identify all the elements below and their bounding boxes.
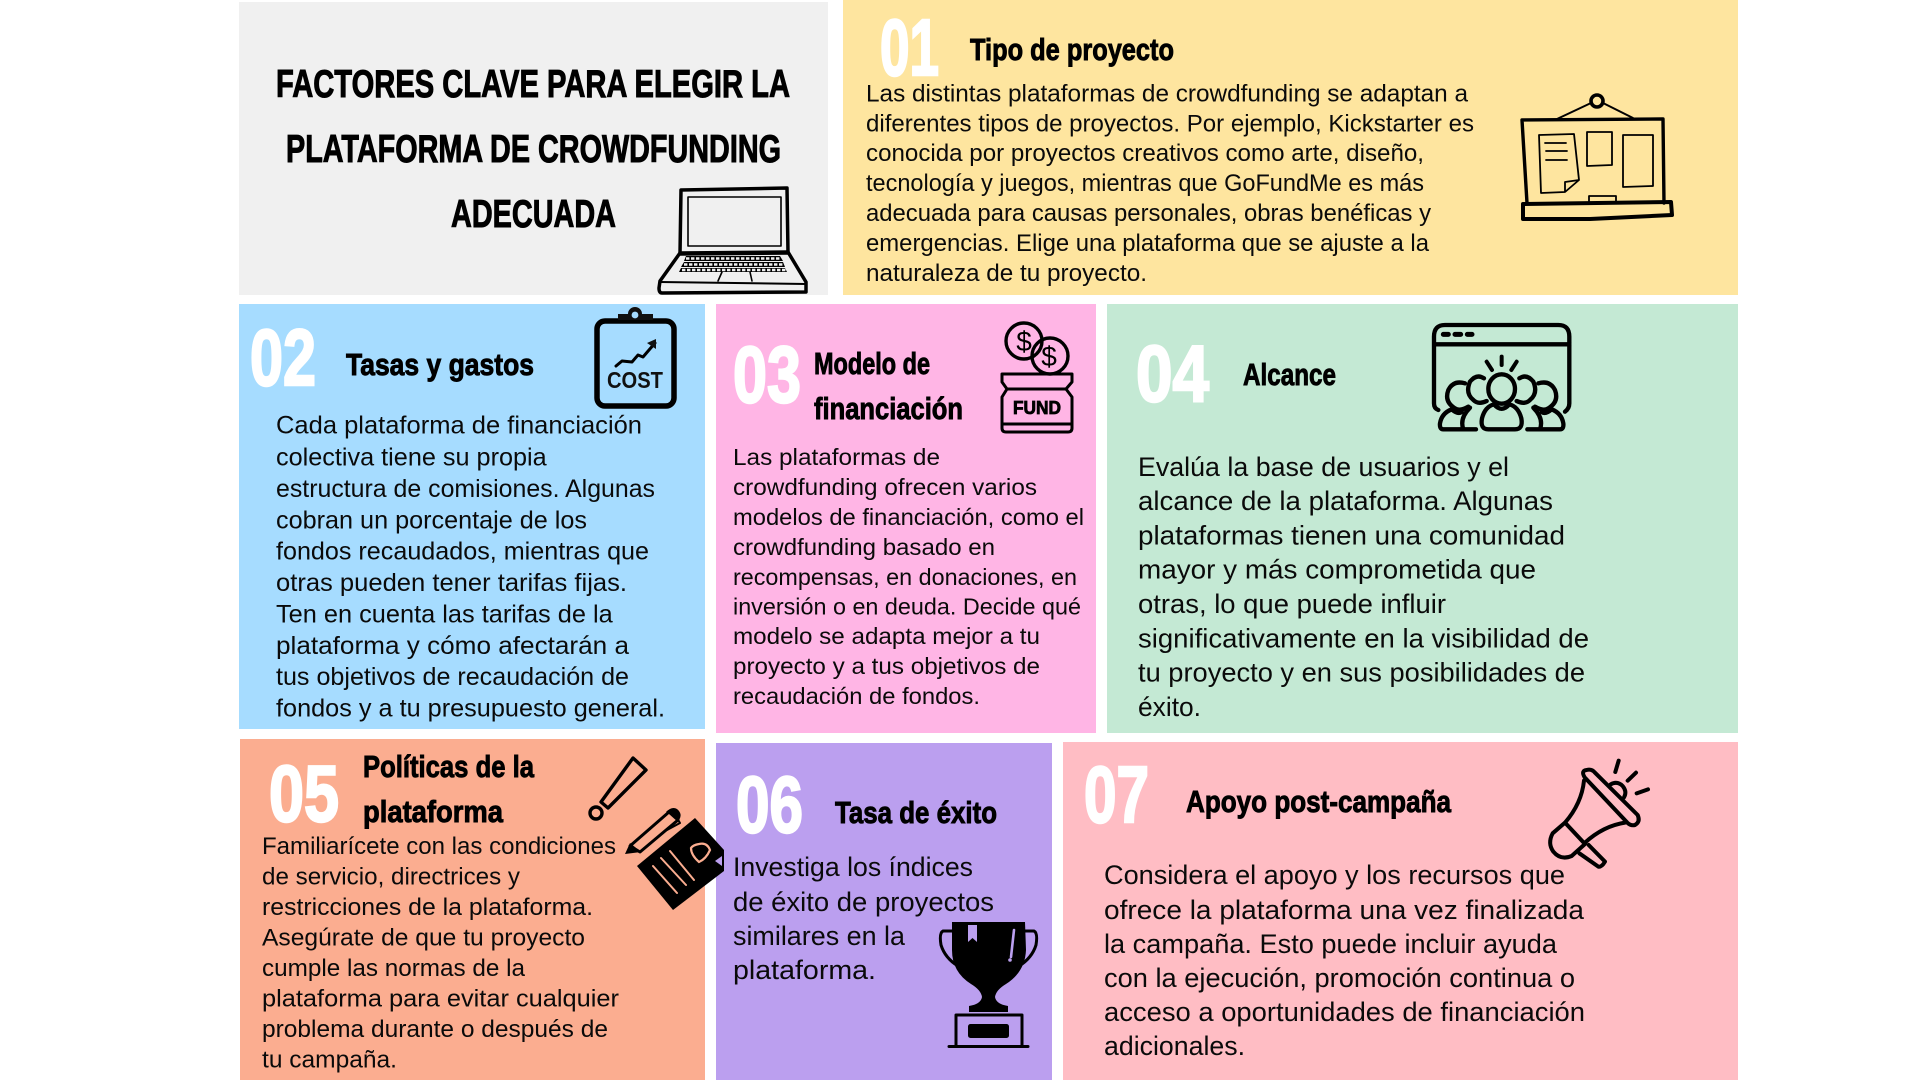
- icon: fund jar: $: [1041, 341, 1057, 372]
- icon: cost clipboard: COST: [607, 367, 663, 393]
- body text: Las plataformas de: [733, 444, 940, 470]
- number 03: 03: [733, 330, 801, 419]
- heading: Tipo de proyecto: [970, 32, 1174, 67]
- heading: Tasa de éxito: [835, 795, 997, 830]
- body text: modelos de financiación, como el: [733, 504, 1084, 530]
- body text: estructura de comisiones. Algunas: [276, 475, 655, 503]
- body text: con la ejecución, promoción continua o: [1104, 963, 1575, 993]
- body text: fondos y a tu presupuesto general.: [276, 694, 665, 722]
- panel: 06 tasa de exito: [716, 743, 1052, 1080]
- body text: recaudación de fondos.: [733, 683, 980, 709]
- panel: 07 apoyo post-campana: [1063, 742, 1738, 1080]
- body text: de éxito de proyectos: [733, 887, 994, 917]
- body text: adicionales.: [1104, 1031, 1245, 1061]
- body text: [733, 444, 1084, 709]
- heading: plataforma: [363, 794, 504, 829]
- body text: emergencias. Elige una plataforma que se ajuste a la: [866, 230, 1430, 257]
- body text: adecuada para causas personales, obras benéficas y: [866, 200, 1431, 227]
- panel: 02 tasas y gastos: [239, 304, 705, 729]
- body text: [262, 833, 619, 1074]
- body text: Investiga los índices: [733, 852, 973, 882]
- body text: otras pueden tener tarifas fijas.: [276, 569, 627, 597]
- heading: [814, 346, 963, 426]
- icon: trophy: [940, 922, 1037, 1046]
- body text: plataforma y cómo afectarán a: [276, 632, 629, 660]
- body text: Asegúrate de que tu proyecto: [262, 924, 585, 952]
- panel: 03 modelo de financiacion: [716, 304, 1096, 733]
- body text: fondos recaudados, mientras que: [276, 538, 649, 566]
- icon: cost clipboard: [597, 307, 674, 406]
- body text: Considera el apoyo y los recursos que: [1104, 860, 1565, 890]
- icon: fund jar: [1002, 323, 1072, 432]
- body text: otras, lo que puede influir: [1138, 589, 1446, 619]
- number 04: 04: [1136, 329, 1209, 418]
- body text: de servicio, directrices y: [262, 864, 520, 890]
- number 02: 02: [250, 313, 316, 402]
- body text: cobran un porcentaje de los: [276, 506, 587, 534]
- body text: [866, 80, 1474, 287]
- title: [276, 63, 790, 236]
- icon: laptop: [659, 188, 806, 293]
- body text: la campaña. Esto puede incluir ayuda: [1104, 929, 1558, 959]
- body text: conocida por proyectos creativos como arte, diseño,: [866, 140, 1424, 167]
- body text: éxito.: [1138, 692, 1201, 722]
- body text: diferentes tipos de proyectos. Por ejemplo, Kickstarter es: [866, 110, 1474, 138]
- body text: [1104, 860, 1585, 1061]
- heading: [363, 749, 535, 829]
- number 05: 05: [269, 749, 339, 838]
- panel: title: [239, 2, 828, 295]
- body text: [1138, 452, 1589, 722]
- body text: [733, 852, 994, 985]
- body text: Evalúa la base de usuarios y el: [1138, 452, 1509, 482]
- body text: restricciones de la plataforma.: [262, 894, 593, 921]
- body text: plataforma.: [733, 955, 876, 985]
- icon: fund jar: $: [1016, 326, 1032, 357]
- body text: tecnología y juegos, mientras que GoFundMe es más: [866, 170, 1424, 197]
- icon: megaphone: [1550, 761, 1648, 867]
- title: FACTORES CLAVE PARA ELEGIR LA: [276, 63, 790, 106]
- body text: Las distintas plataformas de crowdfunding se adaptan a: [866, 80, 1469, 108]
- body text: mayor y más comprometida que: [1138, 554, 1536, 584]
- body text: colectiva tiene su propia: [276, 444, 547, 472]
- panel: 04 alcance: [1107, 304, 1738, 733]
- panel: 05 politicas de la plataforma: [240, 739, 724, 1080]
- heading: Apoyo post-campaña: [1186, 784, 1452, 819]
- body text: tu campaña.: [262, 1046, 397, 1074]
- number 07: 07: [1084, 750, 1149, 839]
- body text: [276, 412, 665, 722]
- body text: Familiarícete con las condiciones: [262, 833, 616, 860]
- body text: acceso a oportunidades de financiación: [1104, 997, 1585, 1027]
- title: PLATAFORMA DE CROWDFUNDING: [286, 128, 781, 171]
- body text: modelo se adapta mejor a tu: [733, 623, 1040, 649]
- body text: problema durante o después de: [262, 1016, 608, 1043]
- icon: audience window: [1434, 325, 1569, 429]
- body text: plataformas tienen una comunidad: [1138, 520, 1565, 550]
- icon: exclamation, pen and document: [590, 758, 724, 910]
- icon: pin board: [1522, 95, 1672, 219]
- body text: Cada plataforma de financiación: [276, 412, 642, 440]
- body text: tus objetivos de recaudación de: [276, 663, 629, 691]
- body text: plataforma para evitar cualquier: [262, 986, 619, 1012]
- heading: Alcance: [1243, 357, 1336, 392]
- body text: inversión o en deuda. Decide qué: [733, 594, 1081, 620]
- body text: crowdfunding basado en: [733, 534, 995, 560]
- body text: Ten en cuenta las tarifas de la: [276, 600, 613, 628]
- icon: fund jar: FUND: [1013, 398, 1061, 418]
- heading: Modelo de: [814, 346, 930, 381]
- body text: cumple las normas de la: [262, 955, 526, 982]
- body text: crowdfunding ofrecen varios: [733, 474, 1037, 500]
- heading: Tasas y gastos: [346, 347, 534, 382]
- body text: tu proyecto y en sus posibilidades de: [1138, 658, 1585, 688]
- panel: 01 tipo de proyecto: [843, 0, 1738, 295]
- title: ADECUADA: [451, 193, 616, 236]
- number 01: 01: [880, 3, 939, 92]
- body text: ofrece la plataforma una vez finalizada: [1104, 895, 1585, 925]
- body text: alcance de la plataforma. Algunas: [1138, 486, 1553, 516]
- heading: financiación: [814, 391, 963, 426]
- body text: significativamente en la visibilidad de: [1138, 624, 1589, 654]
- body text: recompensas, en donaciones, en: [733, 564, 1077, 590]
- body text: similares en la: [733, 921, 906, 951]
- body text: proyecto y a tus objetivos de: [733, 653, 1040, 679]
- number 06: 06: [736, 760, 803, 849]
- body text: naturaleza de tu proyecto.: [866, 260, 1147, 287]
- heading: Políticas de la: [363, 749, 535, 784]
